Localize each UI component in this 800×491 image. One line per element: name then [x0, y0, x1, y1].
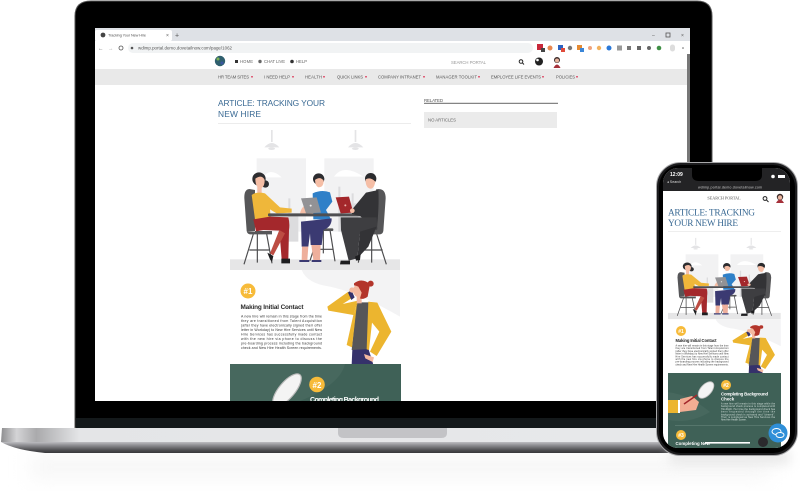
phone step 1: they are transitioned from Talent Acquisition: [676, 347, 729, 350]
illustration: team meeting: [230, 130, 400, 270]
phone status bar: [663, 168, 790, 191]
phone status bar: ◂ Search: [667, 180, 681, 184]
phone step 2 panel: New Hire Health Screen.: [721, 419, 747, 422]
article title: NEW HIRE: [218, 109, 261, 119]
phone article title: YOUR NEW HIRE: [668, 219, 738, 229]
browser tab strip: [95, 28, 690, 41]
step 1 body text: check and New Hire Health Screen requirements.: [241, 346, 322, 350]
base front edge: [1, 442, 785, 453]
laptop lid: [75, 1, 712, 428]
phone step 1: Hire Services has successfully made contact: [676, 355, 729, 358]
browser address bar: wdimp.portal.demo.dovetailnow.com/page/1062: [138, 46, 233, 51]
navigation bar: HR TEAM SITES: [218, 74, 249, 80]
phone step 1: (after they have electronically signed their offer: [676, 350, 729, 353]
home indicator: [705, 442, 750, 444]
browser tab strip: ×: [166, 33, 169, 39]
chat bubble button: [768, 424, 788, 442]
browser tab strip: –: [652, 33, 655, 39]
browser tab strip: +: [175, 32, 179, 40]
navigation bar: POLICIES: [556, 74, 575, 80]
phone article title: [668, 208, 781, 232]
phone step 2 panel: Completing New: [676, 441, 710, 446]
step 1 body text: pre-boarding process including the background: [241, 342, 322, 346]
browser address bar: →: [108, 46, 114, 52]
magnifier: [272, 373, 302, 401]
article title: [218, 98, 411, 124]
bezel bottom strip: [76, 418, 711, 428]
step 1 body text: they are transitioned from Talent Acquisition: [241, 319, 322, 323]
phone search row: SEARCH PORTAL: [707, 196, 741, 200]
browser address bar: ←: [98, 46, 104, 52]
related sidebar: RELATED: [424, 98, 443, 103]
step 1 heading: Making Initial Contact: [240, 304, 304, 311]
phone step 2 panel: Completing Background: [721, 392, 768, 396]
extension icons: [537, 44, 684, 52]
logo: [215, 56, 225, 66]
step 2 green panel: [230, 364, 401, 401]
phone status bar: wdimp.portal.demo.dovetailnow.com: [698, 186, 762, 190]
step 1 body text: letter in Workday) to New Hire Services until New: [241, 328, 322, 332]
navigation bar: EMPLOYEE LIFE EVENTS: [491, 74, 541, 80]
phone step 2 panel: #3: [678, 433, 684, 439]
phone step 2 panel: Their is completed as New Hire Services the: [721, 416, 776, 419]
phone step 2 panel: background check is activated and "cleared".: [721, 413, 775, 416]
step 2 green panel: Completing Background: [310, 397, 379, 404]
scrollbar: [687, 54, 690, 162]
phone step 2 panel: [668, 373, 781, 448]
step 1 badge: #1: [244, 287, 253, 296]
phone shadow: [670, 450, 790, 464]
phone step 1: with the new hire via phone to discuss the: [676, 358, 729, 361]
phone illustration: man on phone: [716, 319, 781, 374]
illustration: man on phone: [302, 270, 400, 365]
site header: HELP: [296, 59, 307, 64]
navigation bar: COMPANY INTRANET: [378, 74, 421, 80]
browser tab strip: ×: [681, 33, 684, 39]
phone status bar: 12:09: [670, 172, 683, 178]
phone step 1: Making Initial Contact: [676, 338, 717, 343]
related sidebar: NO ARTICLES: [428, 118, 456, 122]
browser tab strip: Tracking Your New Hire: [108, 34, 146, 38]
site header: CHAT LIVE: [264, 59, 285, 64]
phone step 2 panel: A new hire will remain in this stage while the: [721, 402, 776, 406]
phone body: [656, 162, 798, 456]
ground shadow: [30, 456, 770, 478]
navigation bar: [95, 69, 687, 85]
phone screen: [663, 168, 790, 448]
trackpad notch: [338, 428, 447, 438]
step 1 body text: [241, 314, 323, 350]
navigation bar: QUICK LINKS: [337, 74, 363, 80]
laptop base: [1, 428, 785, 442]
navigation bar: I NEED HELP: [264, 74, 290, 80]
step 1 body text: A new hire will remain in this stage from the time: [241, 314, 322, 318]
article title: ARTICLE: TRACKING YOUR: [218, 98, 325, 108]
phone step 2 panel: HireRight. Her time the background check has: [721, 408, 776, 411]
phone illustration: team meeting: [668, 238, 781, 319]
phone step 1: letter in Workday) to New Hire Services until New: [676, 353, 729, 356]
related sidebar: [424, 98, 558, 128]
step 1 badge: [240, 284, 256, 298]
phone step 1: check and New Hire Health Screen requirements.: [676, 363, 729, 366]
phone step 1: A new hire will remain in this stage from the time: [676, 344, 729, 348]
phone step 1: [676, 326, 729, 366]
navigation bar: HEALTH: [305, 74, 322, 80]
step 2 green panel: #2: [313, 381, 322, 390]
browser address bar: [99, 43, 533, 53]
site header: [215, 56, 561, 68]
step 1 body text: with the new hire via phone to discuss the: [241, 337, 322, 341]
icon: hand with magnifier: [668, 381, 714, 413]
laptop screen: [95, 28, 690, 410]
phone step 2 panel: #2: [723, 383, 729, 389]
site header: HOME: [240, 59, 253, 64]
phone step 2 panel: been requested through the time the: [721, 411, 776, 414]
phone: [656, 162, 798, 456]
step 1 body text: (after they have electronically signed their offer: [241, 324, 323, 328]
site header: SEARCH PORTAL: [451, 60, 487, 65]
phone step 1: pre-boarding process including the background: [676, 361, 729, 364]
step 1 body text: Hire Services has successfully made contact: [241, 332, 322, 336]
phone step 2 panel: Check: [721, 396, 735, 402]
phone search row: [707, 194, 784, 203]
phone step 2 panel: background check process is completed with: [721, 405, 776, 408]
navigation bar: MANAGER TOOLKIT: [436, 74, 477, 80]
phone step 1: #1: [678, 329, 684, 335]
phone article title: ARTICLE: TRACKING: [668, 208, 755, 218]
